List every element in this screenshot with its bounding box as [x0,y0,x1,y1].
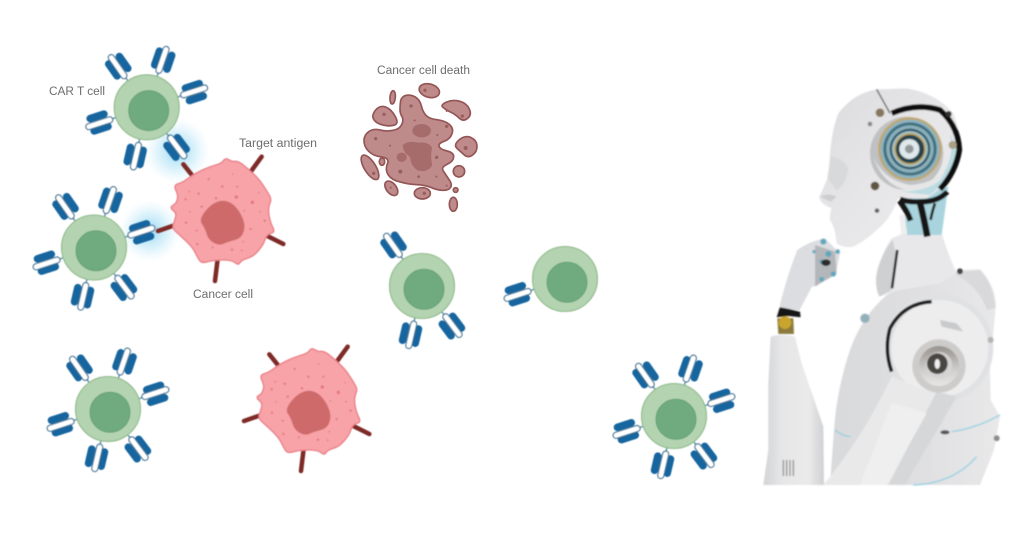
glow: lower binding site [119,200,181,262]
label: cancer cell death: Cancer cell death [377,65,470,77]
icon: CAR T cell right [610,352,738,481]
robot head mechanism [900,133,958,195]
icon: CAR T cell top [83,44,211,172]
robot neck [876,233,957,297]
robot neck wires [899,192,947,237]
robot cyan lines [835,415,1000,485]
icon: CAR T cell middle left [30,184,158,312]
robot upper arm [823,377,957,485]
robot metal sphere [926,352,952,379]
icon: thinking robot [763,88,1000,485]
icon: T cell with three receptors [377,228,469,351]
robot torso [830,269,1000,485]
label: target antigen: Target antigen [239,138,317,150]
robot neck cyan base [903,187,948,235]
robot shoulder [883,293,993,403]
robot neck strut [899,214,907,235]
glow: upper binding site [144,118,210,184]
icon: dying cancer cell fragments [358,82,477,211]
robot shoulder ball joint [912,339,966,393]
robot hand [779,238,840,311]
icon: cancer cell lower [244,347,369,471]
icon: cancer cell bound by CAR T cells [158,157,283,281]
label: cancer cell: Cancer cell [193,289,253,301]
robot wrist [777,318,794,334]
robot upright forearm [763,335,824,485]
robot head [819,88,959,247]
icon: CAR T cell lower left [44,345,172,474]
label: CAR T cell: CAR T cell [49,86,105,98]
icon: T cell with one receptor [501,246,598,312]
